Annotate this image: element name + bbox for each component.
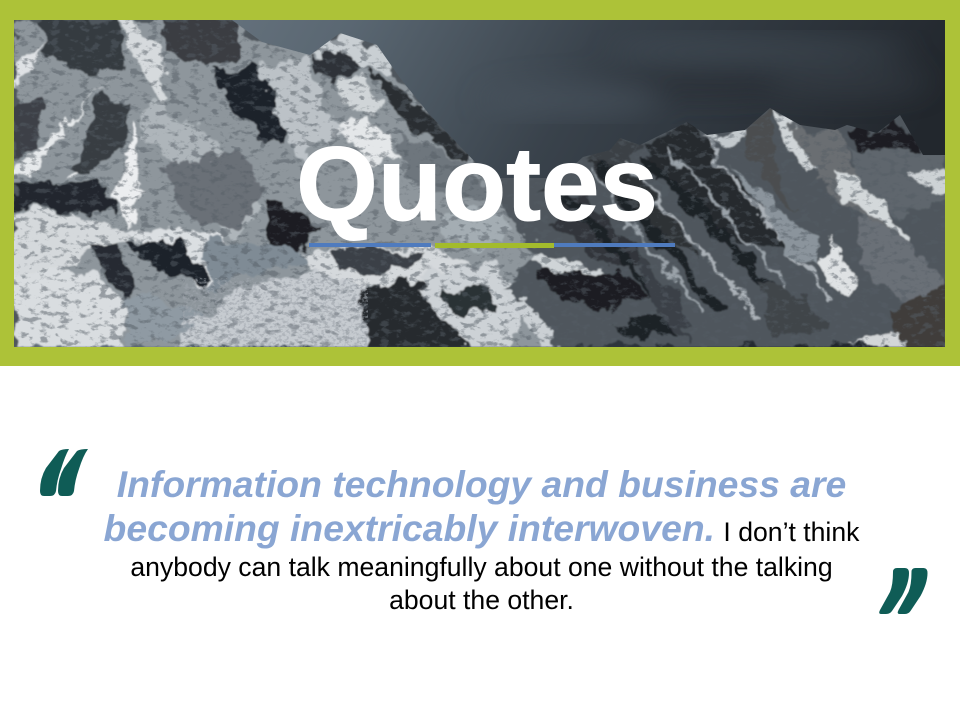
title underline: blue, green, blue segments [309,243,675,248]
left massif [14,20,542,347]
mountains [0,0,960,347]
icon: opening quotation mark [40,449,88,496]
quote text: about the other. [389,585,574,615]
sky [14,20,945,347]
background fill under displaced shapes [0,0,960,347]
title: Quotes: Quotes [296,126,658,243]
quote text: anybody can talk meaningfully about one without the talking [130,552,833,582]
right range [587,138,644,176]
icon: closing quotation mark [879,568,928,614]
photo: snowy mountain range [14,20,945,347]
quote text: Information technology and business are [117,463,846,505]
rock texture [14,20,945,347]
header band: green frame with mountain photo [0,0,960,366]
quote text: becoming inextricably interwoven. I don’t think [104,507,859,549]
quote text [104,463,860,615]
